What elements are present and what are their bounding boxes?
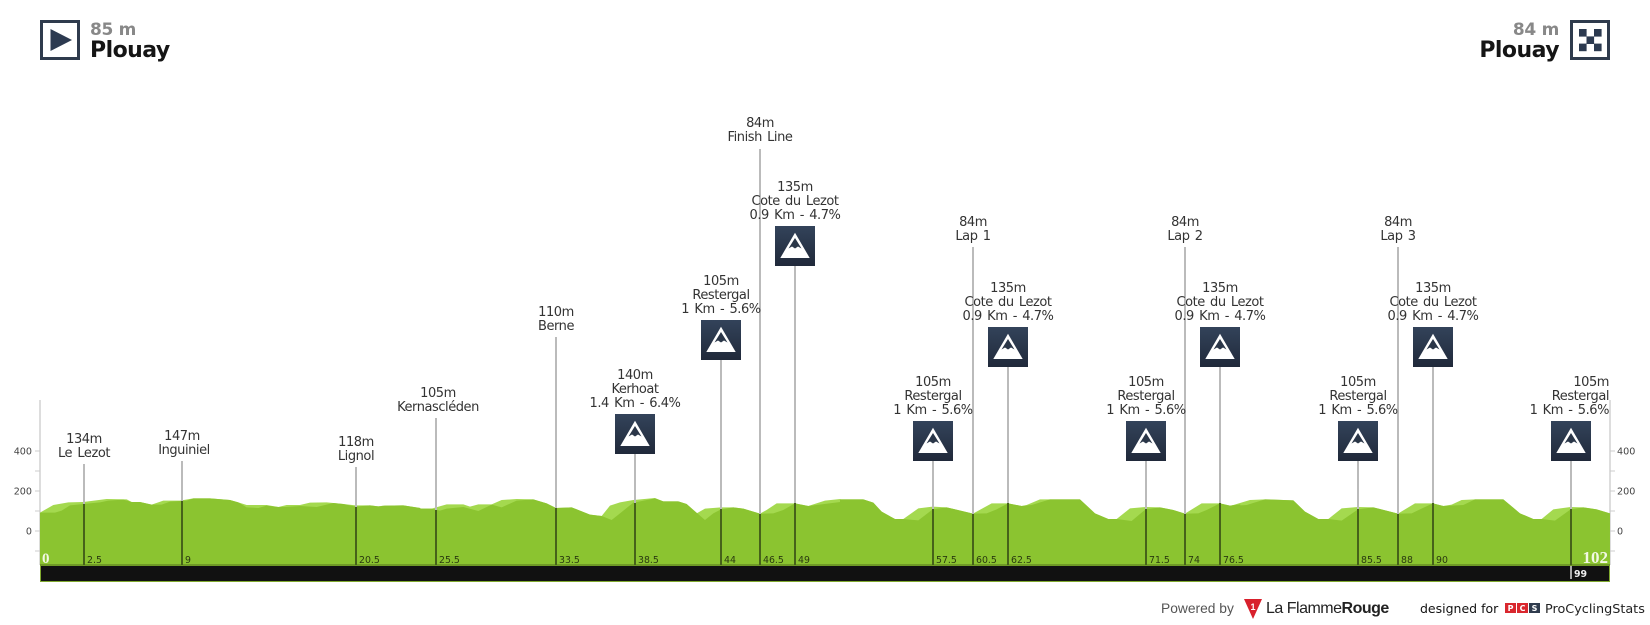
right elevation axis [1609,400,1635,565]
left elevation axis: 200 [14,486,32,498]
footer: designed for ProCyclingStats [1420,601,1645,617]
label: Berne [538,305,574,334]
km labels: 9 [185,555,191,566]
label: Le Lezot: Le Lezot [58,446,110,461]
icon: climb Restergal 85.5 [1338,421,1378,461]
label: Lap 1 [955,215,991,244]
label: Cote du Lezot 49: 0.9 Km - 4.7% [750,208,841,223]
label: Cote du Lezot 76.5 [1175,281,1266,324]
label: Restergal 99: 105m [1573,375,1609,390]
icon: PCS logo: P [1508,604,1514,613]
icon: climb Restergal 44 [701,320,741,360]
km labels: 74 [1188,555,1200,566]
label: Inguiniel: 147m [164,429,200,444]
label: Lap 3 [1380,215,1416,244]
label: Inguiniel: Inguiniel [158,443,210,458]
km distance bar [40,564,1610,582]
label: Restergal 99: Restergal [1552,389,1609,404]
start block: Plouay 85 m [42,20,170,63]
right elevation axis: 0 [1617,526,1623,538]
label: Finish Line: 84m [746,116,774,131]
icon: flamme rouge triangle: 1 [1250,602,1256,612]
icon: climb Restergal 99 [1551,421,1591,461]
label: Restergal 85.5: 1 Km - 5.6% [1318,403,1398,418]
label: Restergal 71.5: Restergal [1117,389,1175,404]
km labels: 71.5 [1149,555,1170,566]
label: Cote du Lezot 49: 135m [777,180,813,195]
footer: designed for ProCyclingStats: ProCyclingStats [1545,602,1645,617]
label: Cote du Lezot 62.5 [963,281,1054,324]
km labels: 25.5 [439,555,460,566]
km labels: 38.5 [638,555,659,566]
icon: climb Kerhoat [615,414,655,454]
label: Restergal 44: Restergal [692,288,750,303]
label: Lignol [338,435,374,464]
label: Kerhoat climb [590,368,681,411]
label: Restergal 57.5: Restergal [904,389,962,404]
icon: climb Restergal 71.5 [1126,421,1166,461]
label: Kernascléden: 105m [420,386,456,401]
label: Cote du Lezot 62.5: Cote du Lezot [964,295,1052,310]
icon: flamme rouge triangle [1244,599,1262,619]
label: Lap 1: Lap 1 [955,229,991,244]
label: Cote du Lezot 76.5: 0.9 Km - 4.7% [1175,309,1266,324]
marker lines above profile [84,149,1571,514]
elevation profile [40,498,1610,565]
right elevation axis: 200 [1617,486,1635,498]
km labels: 33.5 [559,555,580,566]
label: Restergal 99: 1 Km - 5.6% [1530,403,1609,418]
km labels: 85.5 [1361,555,1382,566]
label: Cote du Lezot 49: Cote du Lezot [751,194,839,209]
finish altitude: 84 m [1513,20,1559,40]
label: Restergal 71.5: 1 Km - 5.6% [1106,403,1186,418]
left elevation axis: 0 [26,526,32,538]
marker lines inside profile [84,501,1571,565]
km labels: 62.5 [1011,555,1032,566]
label: Restergal 71.5: 105m [1128,375,1164,390]
label: Lap 1: 84m [959,215,987,230]
finish name: Plouay [1479,38,1559,63]
icon: PCS logo: S [1532,604,1538,613]
finish block: Plouay 84 m [1479,20,1608,63]
label: Berne: Berne [538,319,574,334]
label: Lap 2 [1167,215,1203,244]
label: Kerhoat climb: 1.4 Km - 6.4% [590,396,681,411]
label: Lap 3: 84m [1384,215,1412,230]
profile: main green layer [40,498,1610,565]
label: Lap 2: Lap 2 [1167,229,1203,244]
icon: start flag [42,22,78,58]
start altitude: 85 m [90,20,136,40]
icon: climb Cote du Lezot 90 [1413,327,1453,367]
label: Berne: 110m [538,305,574,320]
label: Cote du Lezot 76.5: 135m [1202,281,1238,296]
km 102 label: 102 [1582,548,1608,567]
label: Kernascléden [397,386,479,415]
profile: lighter climb layer [40,498,1610,565]
label: Cote du Lezot 90: 0.9 Km - 4.7% [1388,309,1479,324]
label: Kerhoat climb: Kerhoat [611,382,659,397]
label: Inguiniel [158,429,210,458]
label: Cote du Lezot 90: 135m [1415,281,1451,296]
icon: climb Cote du Lezot 62.5 [988,327,1028,367]
label: Restergal 44: 105m [703,274,739,289]
icon: finish checker flag [1572,22,1608,58]
footer: designed for ProCyclingStats: designed for [1420,601,1499,616]
footer: powered by La Flamme Rouge: La FlammeRouge [1266,600,1389,617]
label: Restergal 85.5: Restergal [1329,389,1387,404]
km distance bar: 99 [1574,569,1587,580]
km 0 label: 0 [42,551,50,567]
label: Cote du Lezot 62.5: 135m [990,281,1026,296]
km labels: 44 [724,555,736,566]
label: Restergal 85.5: 105m [1340,375,1376,390]
label: Cote du Lezot 90 [1388,281,1479,324]
km labels: 60.5 [976,555,997,566]
label: Restergal 99 [1530,375,1609,418]
icon: climb Cote du Lezot 76.5 [1200,327,1240,367]
km labels: 90 [1436,555,1448,566]
label: Cote du Lezot 90: Cote du Lezot [1389,295,1477,310]
km labels: 46.5 [763,555,784,566]
label: Kerhoat climb: 140m [617,368,653,383]
label: Finish Line: Finish Line [728,130,793,145]
km labels: 57.5 [936,555,957,566]
label: Le Lezot: 134m [66,432,102,447]
label: Lap 3: Lap 3 [1380,229,1416,244]
label: Cote du Lezot 76.5: Cote du Lezot [1176,295,1264,310]
icon: PCS logo [1505,603,1540,613]
km labels: 76.5 [1223,555,1244,566]
footer: powered by La Flamme Rouge: Powered by [1161,601,1234,616]
label: Kernascléden: Kernascléden [397,400,479,415]
label: Lignol: Lignol [338,449,374,464]
label: Restergal 57.5: 1 Km - 5.6% [893,403,973,418]
km labels: 20.5 [359,555,380,566]
label: Lap 2: 84m [1171,215,1199,230]
km labels: 49 [798,555,810,566]
label: Le Lezot [58,432,110,461]
start name: Plouay [90,38,170,63]
label: Restergal 71.5 [1106,375,1186,418]
icon: PCS logo: C [1520,604,1526,613]
km labels: 88 [1401,555,1413,566]
label: Restergal 44 [681,274,761,317]
label: Restergal 44: 1 Km - 5.6% [681,302,761,317]
icon: climb Cote du Lezot 49 [775,226,815,266]
label: Cote du Lezot 49 [750,180,841,223]
left elevation axis: 400 [14,446,32,458]
left elevation axis [14,400,41,565]
label: Lignol: 118m [338,435,374,450]
label: Finish Line [728,116,793,145]
km labels [87,555,1448,566]
label: Restergal 57.5: 105m [915,375,951,390]
icon: climb Restergal 57.5 [913,421,953,461]
label: Restergal 57.5 [893,375,973,418]
km labels: 2.5 [87,555,102,566]
footer: powered by La Flamme Rouge [1161,599,1389,619]
label: Restergal 85.5 [1318,375,1398,418]
right elevation axis: 400 [1617,446,1635,458]
label: Cote du Lezot 62.5: 0.9 Km - 4.7% [963,309,1054,324]
